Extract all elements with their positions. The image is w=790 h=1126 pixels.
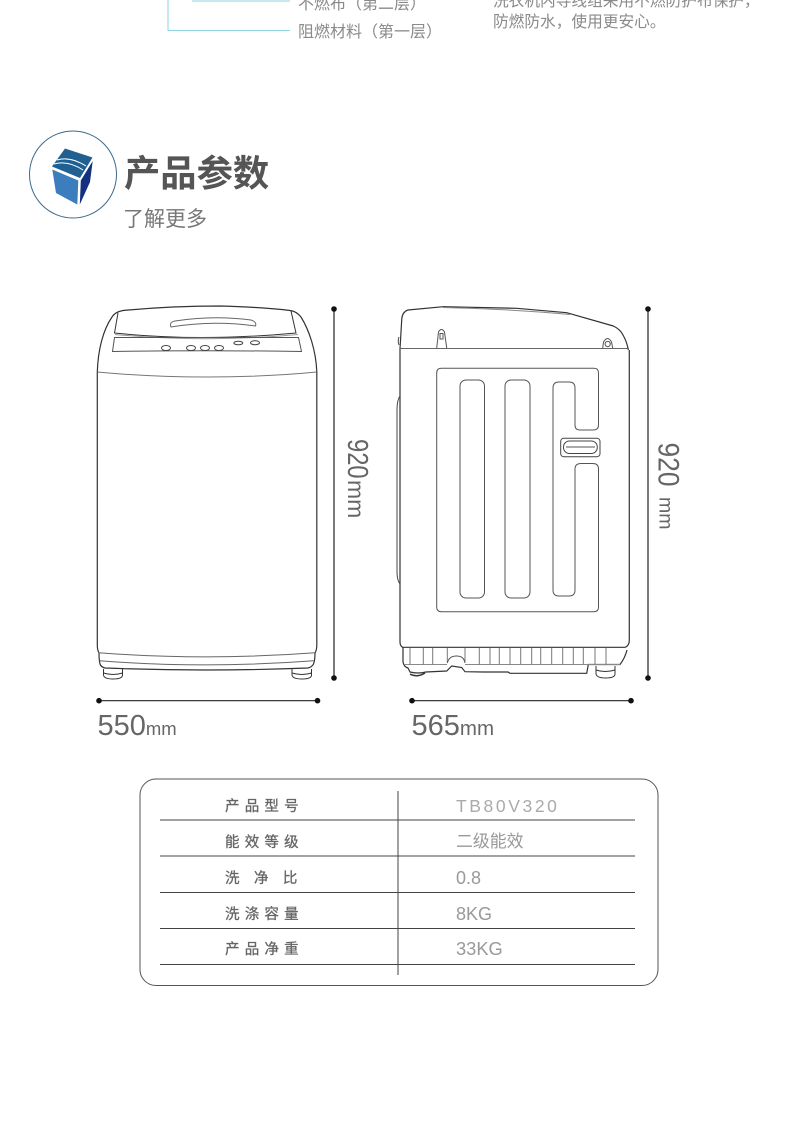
dimension label: 565mm: 565mm (412, 710, 494, 742)
row: wash ratio (225, 868, 481, 888)
side view of washing machine (397, 307, 629, 678)
horizontal dimension line: depth (409, 698, 634, 704)
dimension label: 920mm: mm (343, 480, 369, 518)
dimension label: 920mm (341, 439, 374, 518)
panel: specifications table (140, 779, 658, 986)
hook left (437, 330, 447, 348)
row: energy rating (225, 832, 524, 851)
row: net weight (225, 938, 503, 959)
row: wash ratio: 洗 净 比 (225, 870, 303, 887)
slots (460, 380, 484, 598)
row: net weight: 产品净重 (225, 941, 304, 958)
lid (114, 311, 296, 338)
dimension label: 920 mm (652, 442, 686, 530)
dimension label: 920 mm: 920 (652, 442, 686, 487)
horizontal dimension line: width (96, 698, 320, 704)
row: wash capacity: 洗涤容量 (225, 906, 304, 923)
vertical dimension line: front height (331, 306, 337, 681)
subheading: learn more: 了解更多 (123, 208, 207, 231)
top outline (97, 306, 317, 372)
text block: wiring protection: 防燃防水，使用更安心。 (493, 13, 666, 31)
recessed panel (437, 368, 598, 612)
row: energy rating: 能效等级 (225, 833, 304, 851)
feet (104, 669, 122, 679)
label: flame-retardant material: 阻燃材料（第一层） (298, 23, 442, 41)
connector lines: fabric layers (168, 0, 290, 30)
lid handle (170, 318, 256, 327)
feet (410, 673, 425, 676)
row: wash capacity: 8KG (456, 904, 492, 924)
heading: product parameters: 产品参数 (124, 153, 269, 194)
hook right (603, 338, 613, 348)
side handle (561, 438, 600, 457)
cabinet (97, 372, 317, 670)
vented base (403, 648, 627, 673)
row: model (225, 796, 560, 816)
icon: washing machine in circle (30, 131, 116, 218)
vertical dimension line: side height (645, 306, 651, 681)
dimension label: 550mm: 550mm (98, 710, 177, 742)
row: model: TB80V320 (456, 796, 560, 816)
cabinet (400, 349, 629, 647)
row: energy rating: 二级能效 (456, 832, 524, 851)
text block: wiring protection (493, 0, 760, 31)
dimension label: 920mm: 920 (341, 439, 374, 479)
row: wash capacity (225, 904, 492, 924)
row: net weight: 33KG (456, 938, 503, 959)
table rules (160, 791, 635, 975)
dimension label: 920 mm: mm (654, 497, 676, 530)
row: wash ratio: 0.8 (456, 868, 481, 888)
top outline (400, 307, 628, 350)
control panel (112, 338, 302, 352)
front view of washing machine (97, 306, 317, 679)
buttons (162, 341, 260, 350)
base bands (98, 653, 315, 657)
row: model: 产品型号 (225, 798, 304, 815)
